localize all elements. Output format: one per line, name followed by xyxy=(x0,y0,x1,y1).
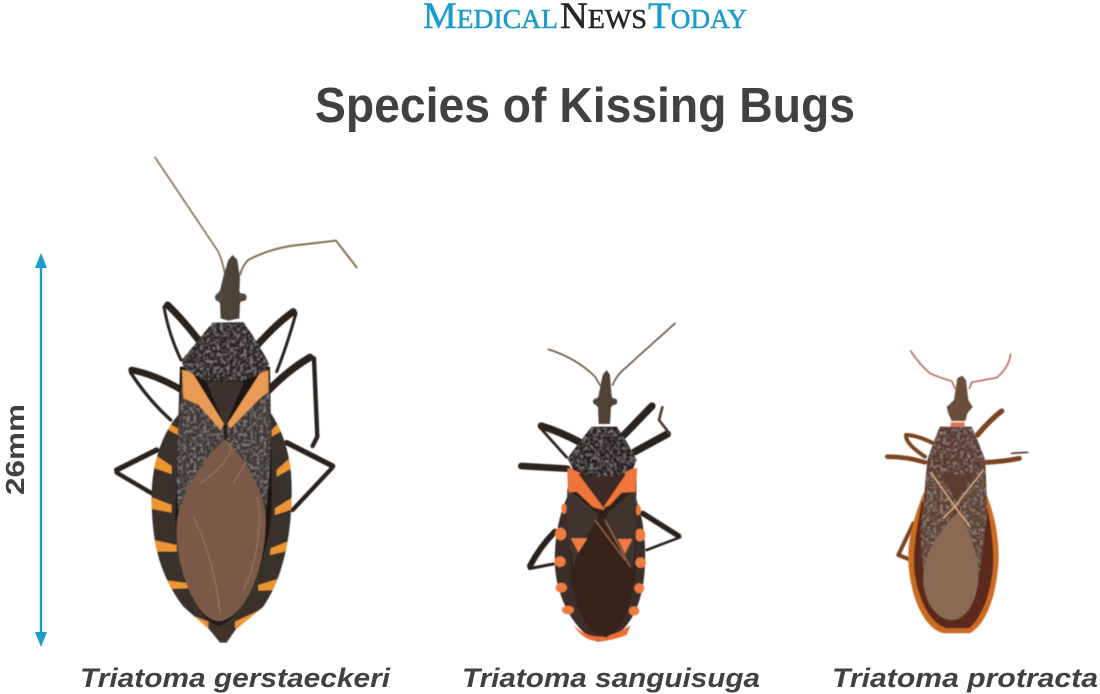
wings xyxy=(177,370,270,513)
abdomen with orange bands xyxy=(148,410,295,630)
logo: Medical News Today xyxy=(423,0,747,37)
scutellum xyxy=(206,382,244,426)
label: 26mm: 26mm xyxy=(0,404,30,495)
wing veins xyxy=(193,443,259,613)
species captions xyxy=(80,663,1098,693)
bug photo: Triatoma sanguisuga xyxy=(521,323,680,642)
neck xyxy=(951,422,965,427)
abdomen dark inner xyxy=(914,498,993,628)
scutellum xyxy=(940,473,975,501)
bug photo: Triatoma gerstaeckeri xyxy=(117,157,357,643)
wings backing xyxy=(567,468,637,638)
head xyxy=(593,370,617,424)
pronotum xyxy=(567,427,637,477)
legs xyxy=(887,411,1028,559)
scutellum xyxy=(578,474,626,507)
caption: Triatoma protracta: Triatoma protracta xyxy=(832,663,1098,693)
wings xyxy=(567,468,637,572)
abdomen xyxy=(554,497,646,642)
arrow: vertical double-headed scale xyxy=(35,253,47,647)
pronotum xyxy=(182,322,269,381)
pronotum xyxy=(927,427,985,474)
wings xyxy=(921,460,987,575)
title: Species of Kissing Bugs xyxy=(315,79,855,133)
bug photo: Triatoma protracta xyxy=(887,351,1028,633)
head xyxy=(215,255,247,321)
abdomen xyxy=(908,493,999,633)
wing orange patches xyxy=(571,538,632,554)
wing light stripes xyxy=(932,470,983,527)
dark body under wings xyxy=(175,367,272,626)
wing veins xyxy=(595,520,630,567)
caption: Triatoma sanguisuga: Triatoma sanguisuga xyxy=(462,663,760,693)
legs xyxy=(521,406,680,569)
antennae xyxy=(155,157,357,275)
scale: 26mm height arrow and label xyxy=(0,253,47,647)
antennae xyxy=(548,323,675,385)
wing membrane xyxy=(923,512,978,620)
head xyxy=(947,376,973,421)
wing membrane xyxy=(177,439,266,621)
legs xyxy=(117,305,333,510)
wing membrane xyxy=(573,517,633,637)
tail tip xyxy=(208,628,237,643)
antennae xyxy=(911,351,1011,388)
caption: Triatoma gerstaeckeri: Triatoma gerstaeckeri xyxy=(80,663,391,693)
